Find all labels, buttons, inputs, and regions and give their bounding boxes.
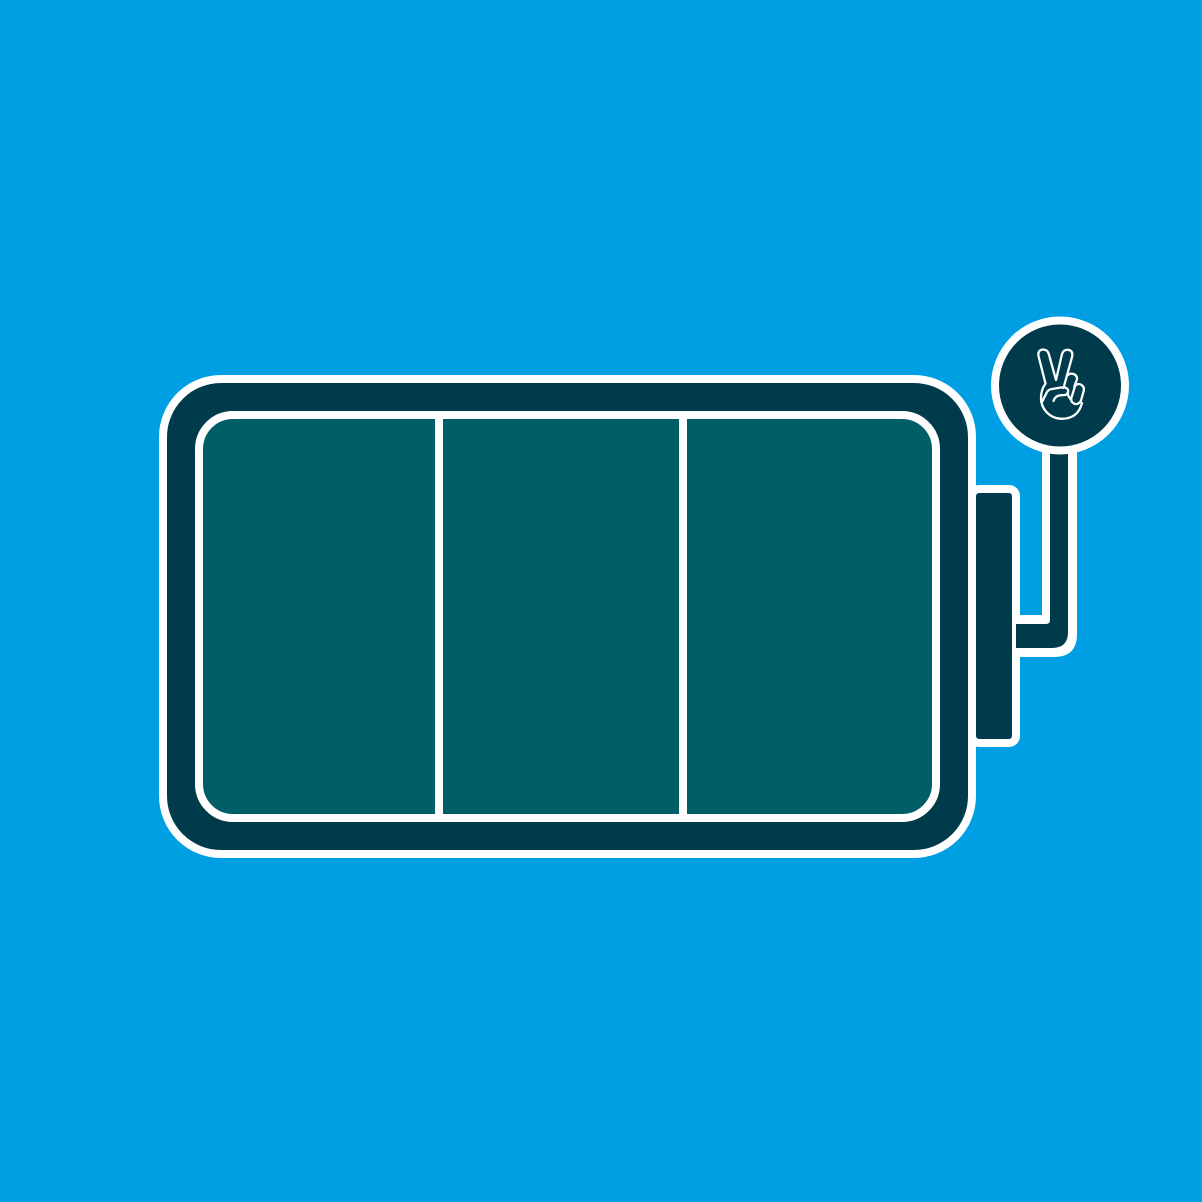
battery illustration (163, 320, 1125, 854)
icon: peace hand (1038, 350, 1084, 419)
cell divider 1 (435, 415, 443, 818)
battery terminal (972, 489, 1016, 743)
battery charge area (199, 415, 936, 818)
cell divider 2 (679, 415, 687, 818)
badge circle (995, 320, 1125, 450)
connector arm (1016, 440, 1077, 657)
battery casing (163, 379, 972, 854)
